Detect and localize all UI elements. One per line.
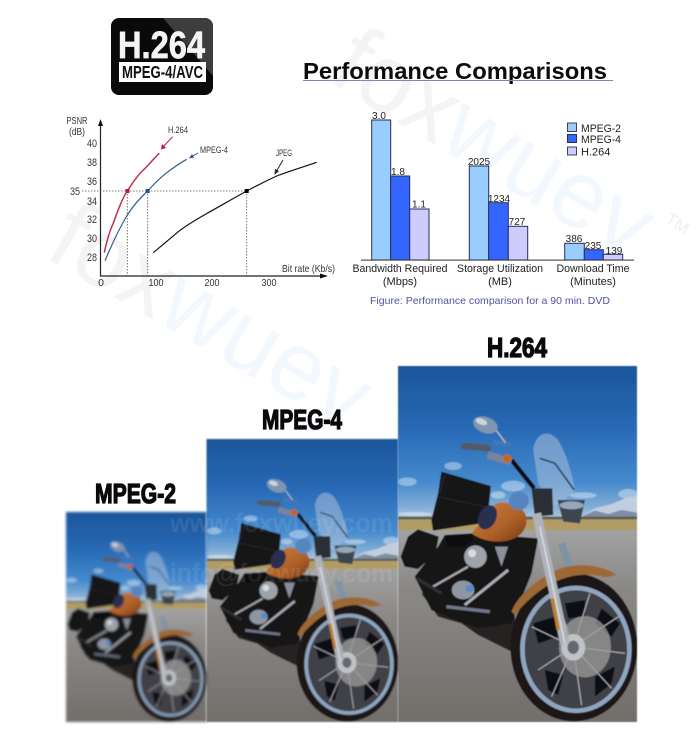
bar chart: performance comparison — [352, 111, 634, 307]
x axis tick labels: 0 — [98, 277, 104, 289]
label and arrow: H.264: H.264 — [168, 125, 188, 136]
category labels: (Mbps) — [383, 276, 417, 288]
watermark: website and email over photos — [169, 508, 393, 588]
photo: MPEG-2 motorcycle, blurred — [66, 512, 207, 722]
x axis tick labels: 300 — [262, 277, 277, 289]
category labels: Bandwidth Required — [352, 263, 448, 275]
y axis tick labels: 32 — [87, 214, 97, 226]
axis title: PSNR: (dB) — [69, 127, 85, 138]
group: Storage Utilization — [469, 166, 528, 260]
x axis title: Bit rate (Kb/s) — [282, 263, 335, 275]
category labels: Download Time — [556, 263, 630, 275]
watermark: upper foxwuey: foxwuey — [316, 6, 673, 279]
baseline — [361, 260, 634, 261]
figure caption: Figure: Performance comparison for a 90 min. DVD — [370, 295, 610, 307]
label: MPEG-4: MPEG-4 — [262, 404, 342, 435]
watermark: lower foxwuey: foxwuey — [33, 182, 391, 450]
line chart: PSNR vs bit rate — [66, 116, 335, 289]
group: Bandwidth Required — [372, 120, 429, 260]
category labels: (Minutes) — [570, 276, 616, 288]
y axis tick labels: 34 — [87, 196, 97, 208]
label: MPEG-2: MPEG-2 — [95, 478, 176, 509]
value labels: 1.8 — [391, 167, 405, 178]
y axis tick labels: 40 — [87, 138, 97, 150]
label: H.264: H.264 — [487, 332, 547, 363]
x axis tick labels: 200 — [204, 277, 220, 289]
category labels — [352, 263, 630, 288]
label and arrow: JPEG: JPEG — [276, 148, 292, 159]
dotted guide lines — [82, 191, 247, 276]
y axis tick labels: 36 — [87, 176, 97, 188]
y axis tick labels — [70, 138, 97, 264]
curve: H.264 — [104, 153, 159, 253]
x axis tick labels — [98, 277, 277, 289]
legend: H.264 — [581, 146, 610, 158]
watermark: website and email over photos: info@foxwuey.com — [170, 558, 393, 588]
y axis tick labels: 28 — [87, 252, 97, 264]
label and arrow: JPEG — [274, 148, 292, 175]
y axis tick labels: 38 — [87, 157, 97, 169]
y axis tick labels: 35 — [70, 186, 80, 198]
label and arrow: MPEG-4 — [189, 145, 228, 158]
axes — [98, 119, 328, 278]
legend: MPEG-2 — [581, 123, 621, 135]
group: Download Time — [565, 243, 623, 260]
logo: H.264 MPEG-4/AVC: H.264 — [118, 25, 205, 67]
axis title: PSNR: PSNR — [66, 116, 88, 127]
legend: MPEG-4 — [581, 134, 621, 146]
value labels: 1.1 — [412, 200, 426, 210]
photo: H.264 motorcycle, sharp — [398, 366, 638, 722]
logo: H.264 MPEG-4/AVC — [111, 18, 213, 95]
legend — [568, 123, 621, 158]
value labels: 2025 — [468, 157, 491, 168]
value labels: 235 — [585, 241, 602, 252]
curve: JPEG — [153, 162, 317, 253]
value labels: 727 — [509, 217, 526, 228]
logo: H.264 MPEG-4/AVC: MPEG-4/AVC — [122, 62, 203, 82]
category labels: Storage Utilization — [457, 263, 543, 275]
watermark: website and email over photos: www.foxwuey.com — [169, 508, 393, 538]
x axis tick labels: 100 — [148, 277, 164, 289]
value labels: 386 — [566, 234, 583, 245]
curve: MPEG-4 — [105, 159, 187, 261]
photo: MPEG-4 motorcycle, slightly blurred — [206, 439, 399, 722]
y axis tick labels: 30 — [87, 233, 97, 245]
value labels: 139 — [606, 246, 623, 257]
value labels: 3.0 — [372, 111, 386, 122]
heading: Performance Comparisons: Performance Comparisons — [303, 58, 607, 84]
value labels — [372, 111, 623, 257]
category labels: (MB) — [488, 276, 512, 288]
watermark: upper foxwuey: TM — [662, 209, 693, 238]
label and arrow: H.264 — [161, 125, 188, 150]
value labels: 1234 — [488, 194, 511, 205]
label and arrow: MPEG-4: MPEG-4 — [200, 145, 228, 156]
axis title: PSNR — [66, 116, 88, 138]
